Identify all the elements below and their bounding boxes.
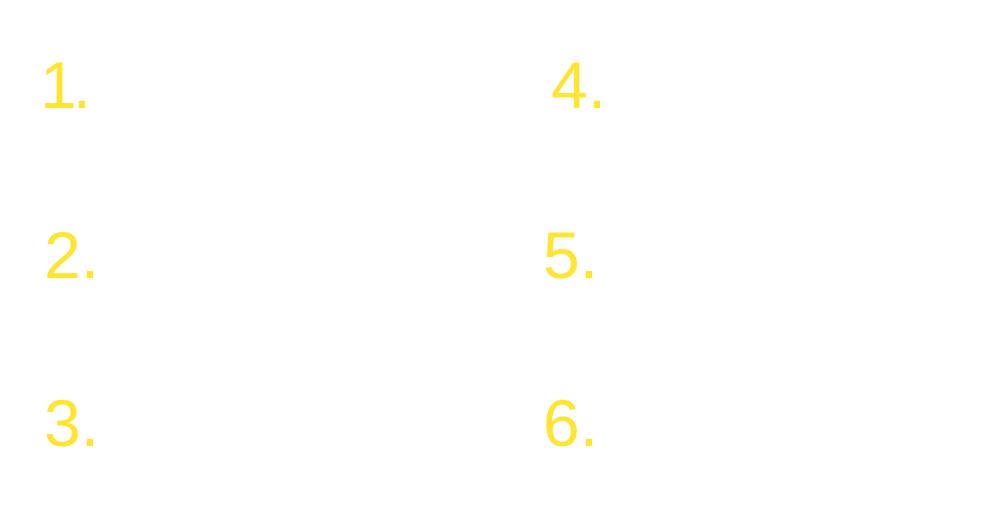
number 6: 6. [543, 386, 598, 460]
number 4: 4. [551, 48, 606, 122]
number 3: 3. [44, 386, 99, 460]
number 5: 5. [543, 218, 598, 292]
number 2: 2. [44, 218, 99, 292]
number 1: 1. [40, 48, 87, 122]
